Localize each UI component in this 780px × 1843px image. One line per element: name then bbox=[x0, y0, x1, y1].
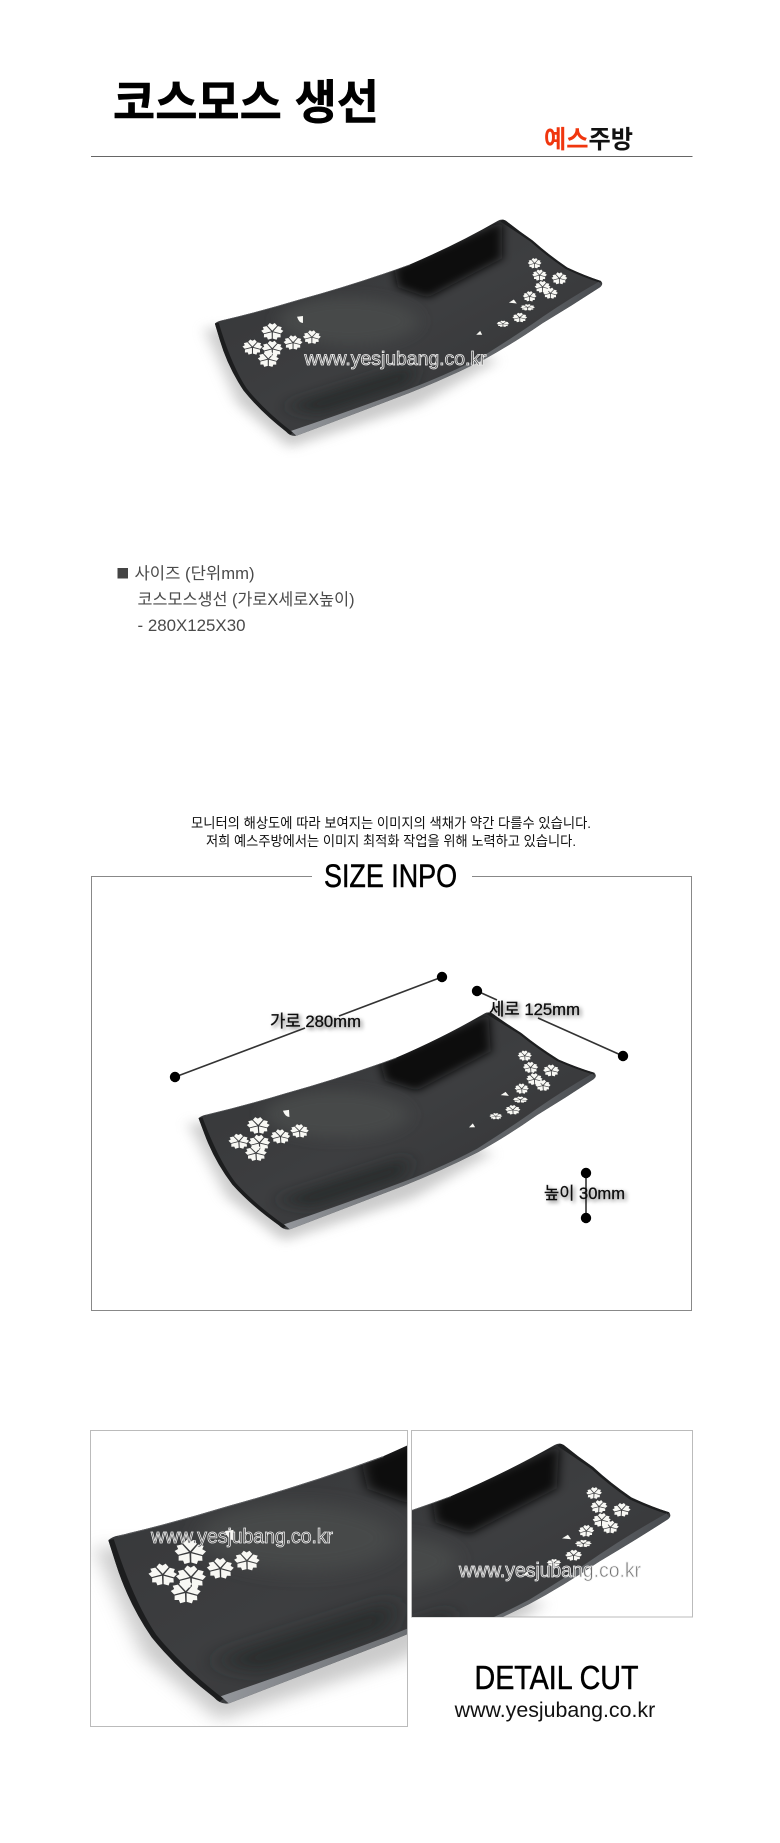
detail photo: left corner bbox=[90, 1430, 408, 1727]
watermark: www.yesjubang.co.kr bbox=[303, 349, 487, 370]
notice line 1: 모니터의 해상도에 따라 보여지는 이미지의 색채가 약간 다를수 있습니다. bbox=[191, 815, 591, 831]
title: 코스모스 생선 bbox=[113, 76, 379, 129]
dimension: height bbox=[544, 1168, 625, 1223]
watermark: www.yesjubang.co.kr bbox=[458, 1560, 641, 1582]
website address: www.yesjubang.co.kr bbox=[454, 1699, 655, 1722]
size specification text bbox=[118, 564, 354, 635]
panel: size info bbox=[92, 858, 692, 1310]
notice line 2: 저희 예스주방에서는 이미지 최적화 작업을 위해 노력하고 있습니다. bbox=[206, 833, 576, 849]
dimension: depth: 세로 125mm bbox=[489, 1000, 580, 1019]
frame bbox=[92, 876, 692, 1310]
size description: 코스모스생선 (가로X세로X높이) bbox=[138, 590, 354, 609]
detail photo: right corner bbox=[411, 1430, 693, 1618]
heading: size inpo: SIZE INPO bbox=[324, 858, 457, 894]
watermark: www.yesjubang.co.kr bbox=[150, 1526, 333, 1548]
dimension: width bbox=[170, 972, 447, 1082]
dimension: height: 높이 30mm bbox=[544, 1184, 625, 1203]
header rule bbox=[91, 156, 692, 157]
plate photo with dimensions bbox=[176, 1004, 620, 1241]
detail cut heading: DETAIL CUT bbox=[474, 1659, 638, 1696]
dimension: width: 가로 280mm bbox=[270, 1012, 361, 1031]
size numbers: - 280X125X30 bbox=[138, 617, 246, 635]
dimension: depth bbox=[472, 986, 628, 1061]
product photo: plate bbox=[200, 210, 616, 449]
size heading: 사이즈 (단위mm) bbox=[134, 564, 254, 583]
bullet square bbox=[118, 568, 128, 578]
brand name: 예스주방 bbox=[544, 126, 633, 154]
monitor notice bbox=[191, 815, 591, 849]
